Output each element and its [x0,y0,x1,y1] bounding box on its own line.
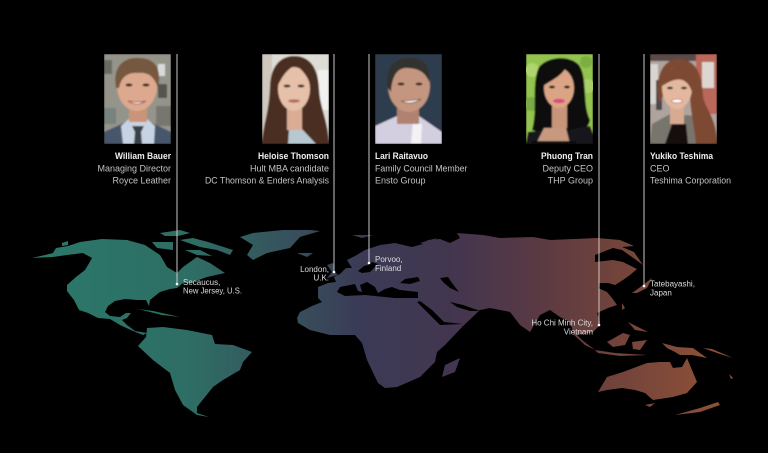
Sumatra and Java [595,350,647,356]
location: Secaucus [183,278,242,296]
location: Ho Chi Minh City: Vietnam [564,328,593,336]
Novaya Zemlya [420,238,437,245]
name: Heloise Thomson: Hult MBA candidate [250,164,329,174]
location: Secaucus: New Jersey, U.S. [183,286,242,296]
Philippines [628,322,648,332]
location: London [300,265,329,282]
Greenland [240,230,320,260]
photo: Lari Raitavuo [375,54,442,144]
name: Yukiko Teshima: Teshima Corporation [650,176,731,186]
location: Tatebayashi: Tatebayashi, [650,280,695,288]
location: Porvoo: Porvoo, [375,255,403,264]
Svalbard [352,235,373,238]
name: Phuong Tran [541,151,593,186]
location: Tatebayashi [650,280,695,298]
name: Lari Raitavuo: Family Council Member [375,164,468,174]
world map [32,230,733,417]
Iceland [297,253,313,257]
name: Phuong Tran: Phuong Tran [541,151,593,161]
Australia [598,358,697,400]
name: Yukiko Teshima [650,151,731,186]
name: Yukiko Teshima: CEO [650,164,670,174]
photo: Heloise Thomson [262,54,329,144]
Cuba [138,309,180,317]
New Zealand [675,402,720,415]
location: London: U.K. [313,274,329,282]
Tasmania [645,403,655,407]
South America [138,327,252,417]
Pacific islands [703,348,733,379]
UK [327,263,338,278]
name: Phuong Tran: THP Group [548,176,593,186]
photo: Yukiko Teshima [650,54,717,144]
name: William Bauer: William Bauer [115,151,171,161]
name: William Bauer: Royce Leather [112,176,171,186]
name: Heloise Thomson: DC Thomson & Enders Analysis [205,176,329,186]
Africa and Eurasia [297,233,643,388]
inland seas [337,262,480,325]
name: Lari Raitavuo [375,151,468,186]
name: Phuong Tran: Deputy CEO [542,164,593,174]
New Guinea [662,343,707,358]
Japan [632,278,652,293]
location: Porvoo: Finland [375,264,401,273]
Taiwan [622,303,625,310]
name: William Bauer [97,151,171,186]
name: Lari Raitavuo: Lari Raitavuo [375,151,428,161]
location: Porvoo [375,255,403,273]
North America [32,239,225,335]
Alaska island [62,241,68,246]
location: London: London, [300,265,329,274]
photo: William Bauer [104,54,171,144]
Borneo [607,333,630,347]
Sulawesi [632,340,647,350]
location: Tatebayashi: Japan [650,288,672,298]
connector lines [177,54,644,325]
name: Heloise Thomson: Heloise Thomson [258,151,329,161]
Madagascar [442,358,460,377]
photo: Phuong Tran [524,54,595,144]
location: Ho Chi Minh City [531,318,593,336]
name: Yukiko Teshima: Yukiko Teshima [650,151,714,161]
name: Lari Raitavuo: Ensto Group [375,176,426,186]
name: Heloise Thomson [205,151,329,186]
name: William Bauer: Managing Director [97,164,171,174]
Arctic islands [152,230,233,256]
location dots [176,262,645,326]
location: Secaucus: Secaucus, [183,278,220,287]
location: Ho Chi Minh City: Ho Chi Minh City, [531,318,593,328]
